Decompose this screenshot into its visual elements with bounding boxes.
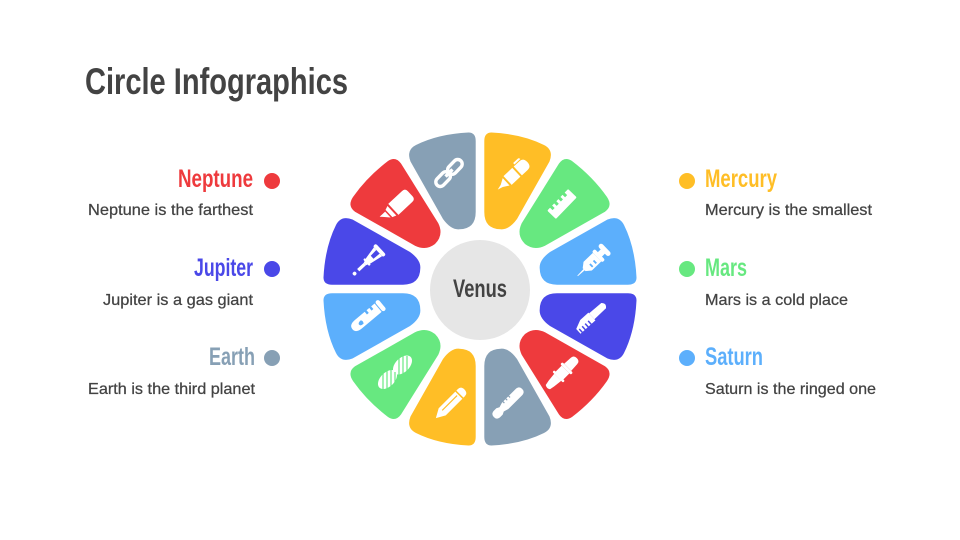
item: Mercury: Mercury bbox=[705, 165, 777, 193]
item: Earth: Earth bbox=[209, 343, 255, 371]
wedge: red upper left bbox=[350, 159, 441, 248]
item: Jupiter: Jupiter bbox=[194, 254, 253, 282]
item: Mercury: Mercury is the smallest bbox=[705, 202, 873, 219]
wedge: green lower left bbox=[350, 330, 441, 419]
icon: thermometer bbox=[490, 385, 525, 420]
wedge: indigo left bbox=[324, 218, 420, 285]
item: Mars: Mars bbox=[705, 254, 747, 282]
item: Jupiter bbox=[103, 254, 280, 309]
icon: comb bbox=[574, 301, 609, 334]
wedge: light blue right bbox=[540, 218, 636, 285]
item: Mars bbox=[679, 254, 848, 309]
icon: ruler bbox=[547, 189, 577, 219]
item: Mars: Mars is a cold place bbox=[705, 292, 848, 309]
item: Neptune bbox=[88, 165, 280, 219]
wedge: red lower right bbox=[519, 330, 610, 419]
icon: syringe bbox=[572, 243, 612, 281]
icon: dropper bbox=[542, 353, 582, 393]
wedge: light blue left bbox=[324, 293, 420, 360]
wedge: yellow bottom bbox=[409, 349, 476, 446]
icon: chain link bbox=[434, 158, 464, 188]
item: Saturn: Saturn bbox=[705, 343, 763, 371]
item: Neptune: Neptune bbox=[178, 165, 253, 193]
icon: dna bbox=[374, 352, 416, 393]
item: Saturn: Saturn is the ringed one bbox=[705, 381, 876, 398]
icon: pencil bbox=[432, 386, 468, 422]
icon: test tube bbox=[348, 299, 386, 334]
wedge: gray top bbox=[409, 132, 476, 229]
icon: crutch bbox=[348, 244, 386, 280]
center label: Venus bbox=[453, 275, 507, 303]
item: Neptune: Neptune is the farthest bbox=[88, 202, 254, 219]
wedge: yellow top bbox=[484, 132, 551, 229]
wedge: gray bottom bbox=[484, 349, 551, 446]
item: Earth: Earth is the third planet bbox=[88, 381, 256, 398]
icon: marker bbox=[377, 188, 415, 225]
title: Circle Infographics bbox=[85, 61, 348, 102]
wedge: green upper right bbox=[519, 159, 610, 248]
icon: pen bbox=[492, 155, 531, 194]
circle diagram bbox=[324, 132, 636, 446]
center circle bbox=[430, 240, 530, 340]
wedge: indigo right bbox=[540, 293, 636, 360]
item: Earth bbox=[88, 343, 280, 398]
item: Mercury bbox=[679, 165, 873, 219]
item: Saturn bbox=[679, 343, 876, 398]
item: Jupiter: Jupiter is a gas giant bbox=[103, 292, 254, 309]
